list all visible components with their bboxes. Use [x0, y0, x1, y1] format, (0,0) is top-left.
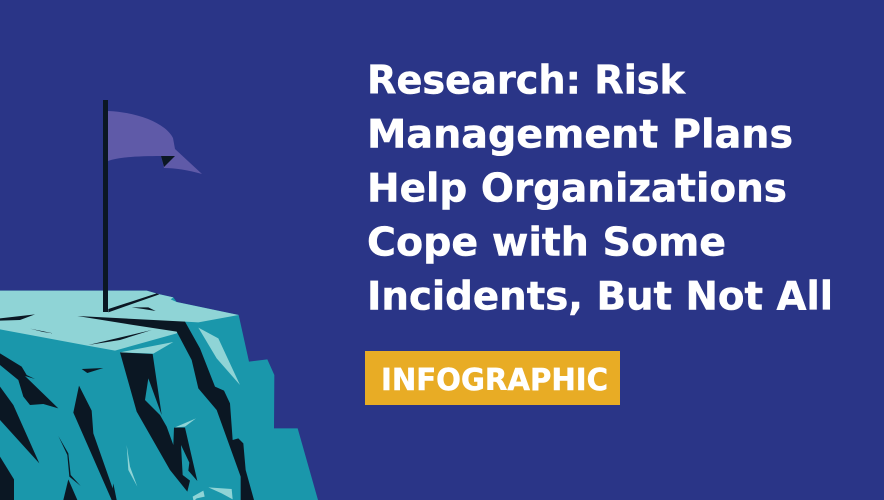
title: Management Plans: [367, 112, 793, 158]
title: Research: Risk: [367, 58, 686, 104]
flag base strut: [108, 293, 159, 312]
flag fold: [161, 156, 175, 167]
cliff body: [0, 291, 318, 500]
title: Cope with Some: [367, 220, 726, 266]
light highlights: [120, 328, 240, 500]
title: [367, 58, 833, 320]
flag pole: [103, 100, 108, 312]
dark cracks: [0, 307, 254, 500]
cliff top face: [0, 291, 239, 351]
badge: infographic: [365, 351, 620, 405]
title: Help Organizations: [367, 166, 787, 212]
icon: flag: [103, 100, 202, 312]
badge: infographic: INFOGRAPHIC: [381, 363, 608, 398]
title: Incidents, But Not All: [367, 274, 833, 320]
flag cloth: [108, 111, 202, 174]
illustration: cliff: [0, 291, 318, 500]
